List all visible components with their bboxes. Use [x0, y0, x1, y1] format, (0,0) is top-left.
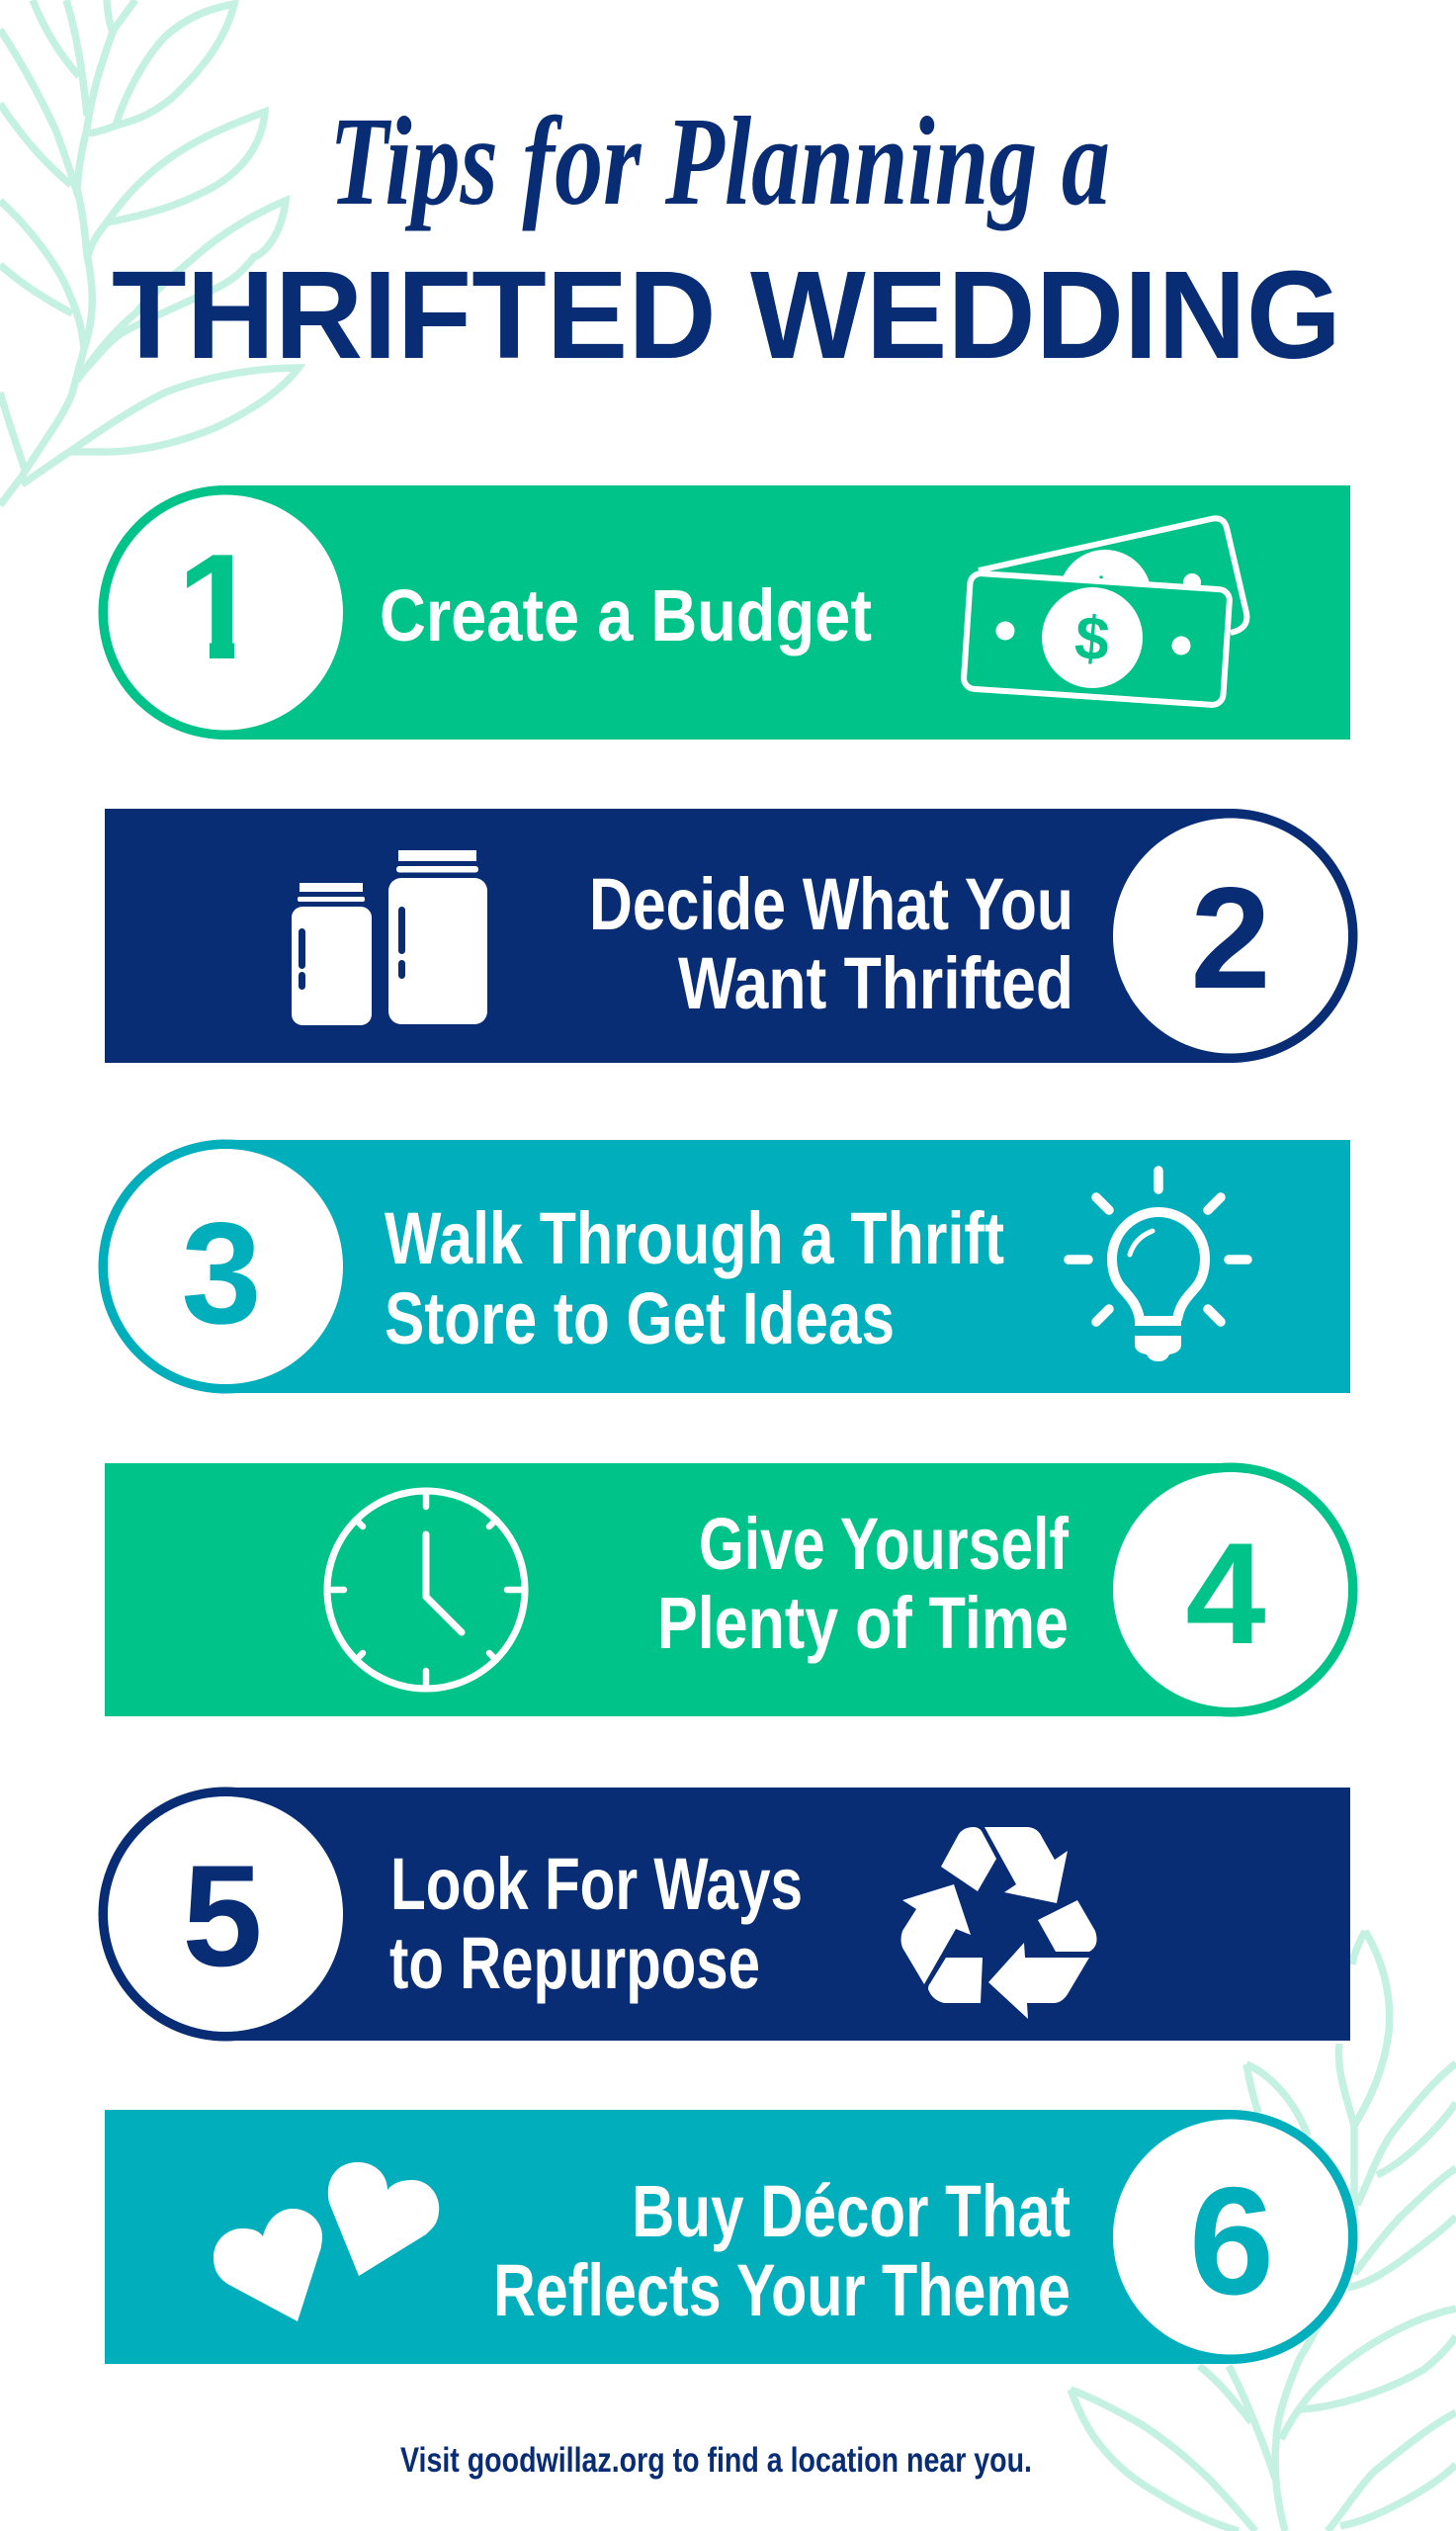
heading: step 4: Give Yourself — [699, 1503, 1069, 1585]
heading: step 6 — [493, 2170, 1071, 2331]
number 6: 6 — [1189, 2155, 1274, 2326]
title line 2: THRIFTED WEDDING — [112, 245, 1341, 385]
heading: step 4: Plenty of Time — [657, 1582, 1069, 1664]
icon: banknotes: $ — [1083, 564, 1128, 634]
panel: step 6 — [105, 2110, 1358, 2364]
icon: hearts — [214, 2162, 439, 2321]
icon: banknotes — [963, 518, 1246, 706]
decorative leaf branch: top left — [0, 0, 299, 505]
number 4: 4 — [1185, 1513, 1266, 1674]
heading: step 3: Store to Get Ideas — [385, 1277, 895, 1359]
heading: step 6: Buy Décor That — [632, 2170, 1071, 2252]
heading: step 3: Walk Through a Thrift — [385, 1197, 1004, 1279]
heading: step 2: Decide What You — [589, 863, 1073, 945]
heading: step 1: Create a Budget — [380, 574, 872, 656]
heading: step 2 — [589, 863, 1073, 1024]
title — [112, 91, 1341, 385]
panel: step 1 — [99, 485, 1350, 740]
title line 1: script: Tips for Planning a — [329, 91, 1110, 231]
heading: step 5: Look For Ways — [390, 1843, 803, 1925]
icon: light bulb — [1069, 1171, 1247, 1361]
icon: recycle symbol — [901, 1827, 1097, 2019]
heading: step 6: Reflects Your Theme — [493, 2249, 1071, 2331]
heading: step 3 — [385, 1197, 1004, 1359]
heading: step 2: Want Thrifted — [678, 942, 1073, 1024]
panel: step 5 — [99, 1788, 1350, 2041]
icon: clock — [327, 1491, 525, 1689]
heading: step 5 — [389, 1843, 803, 2004]
panel: step 3 — [99, 1139, 1350, 1394]
number 5: 5 — [182, 1835, 263, 1996]
decorative leaf branch: bottom right — [1071, 1931, 1456, 2531]
panel: step 4 — [105, 1463, 1358, 1716]
footer text: Visit goodwillaz.org to find a location near you. — [400, 2441, 1032, 2480]
panel: step 2 — [105, 809, 1358, 1063]
number 2: 2 — [1190, 857, 1271, 1018]
number 3: 3 — [181, 1192, 262, 1353]
heading: step 5: to Repurpose — [389, 1922, 760, 2004]
heading: step 4 — [657, 1503, 1069, 1664]
icon: mason jars — [292, 850, 487, 1025]
number 1: 1 — [177, 523, 260, 691]
icon: banknotes: $ — [1072, 604, 1112, 674]
